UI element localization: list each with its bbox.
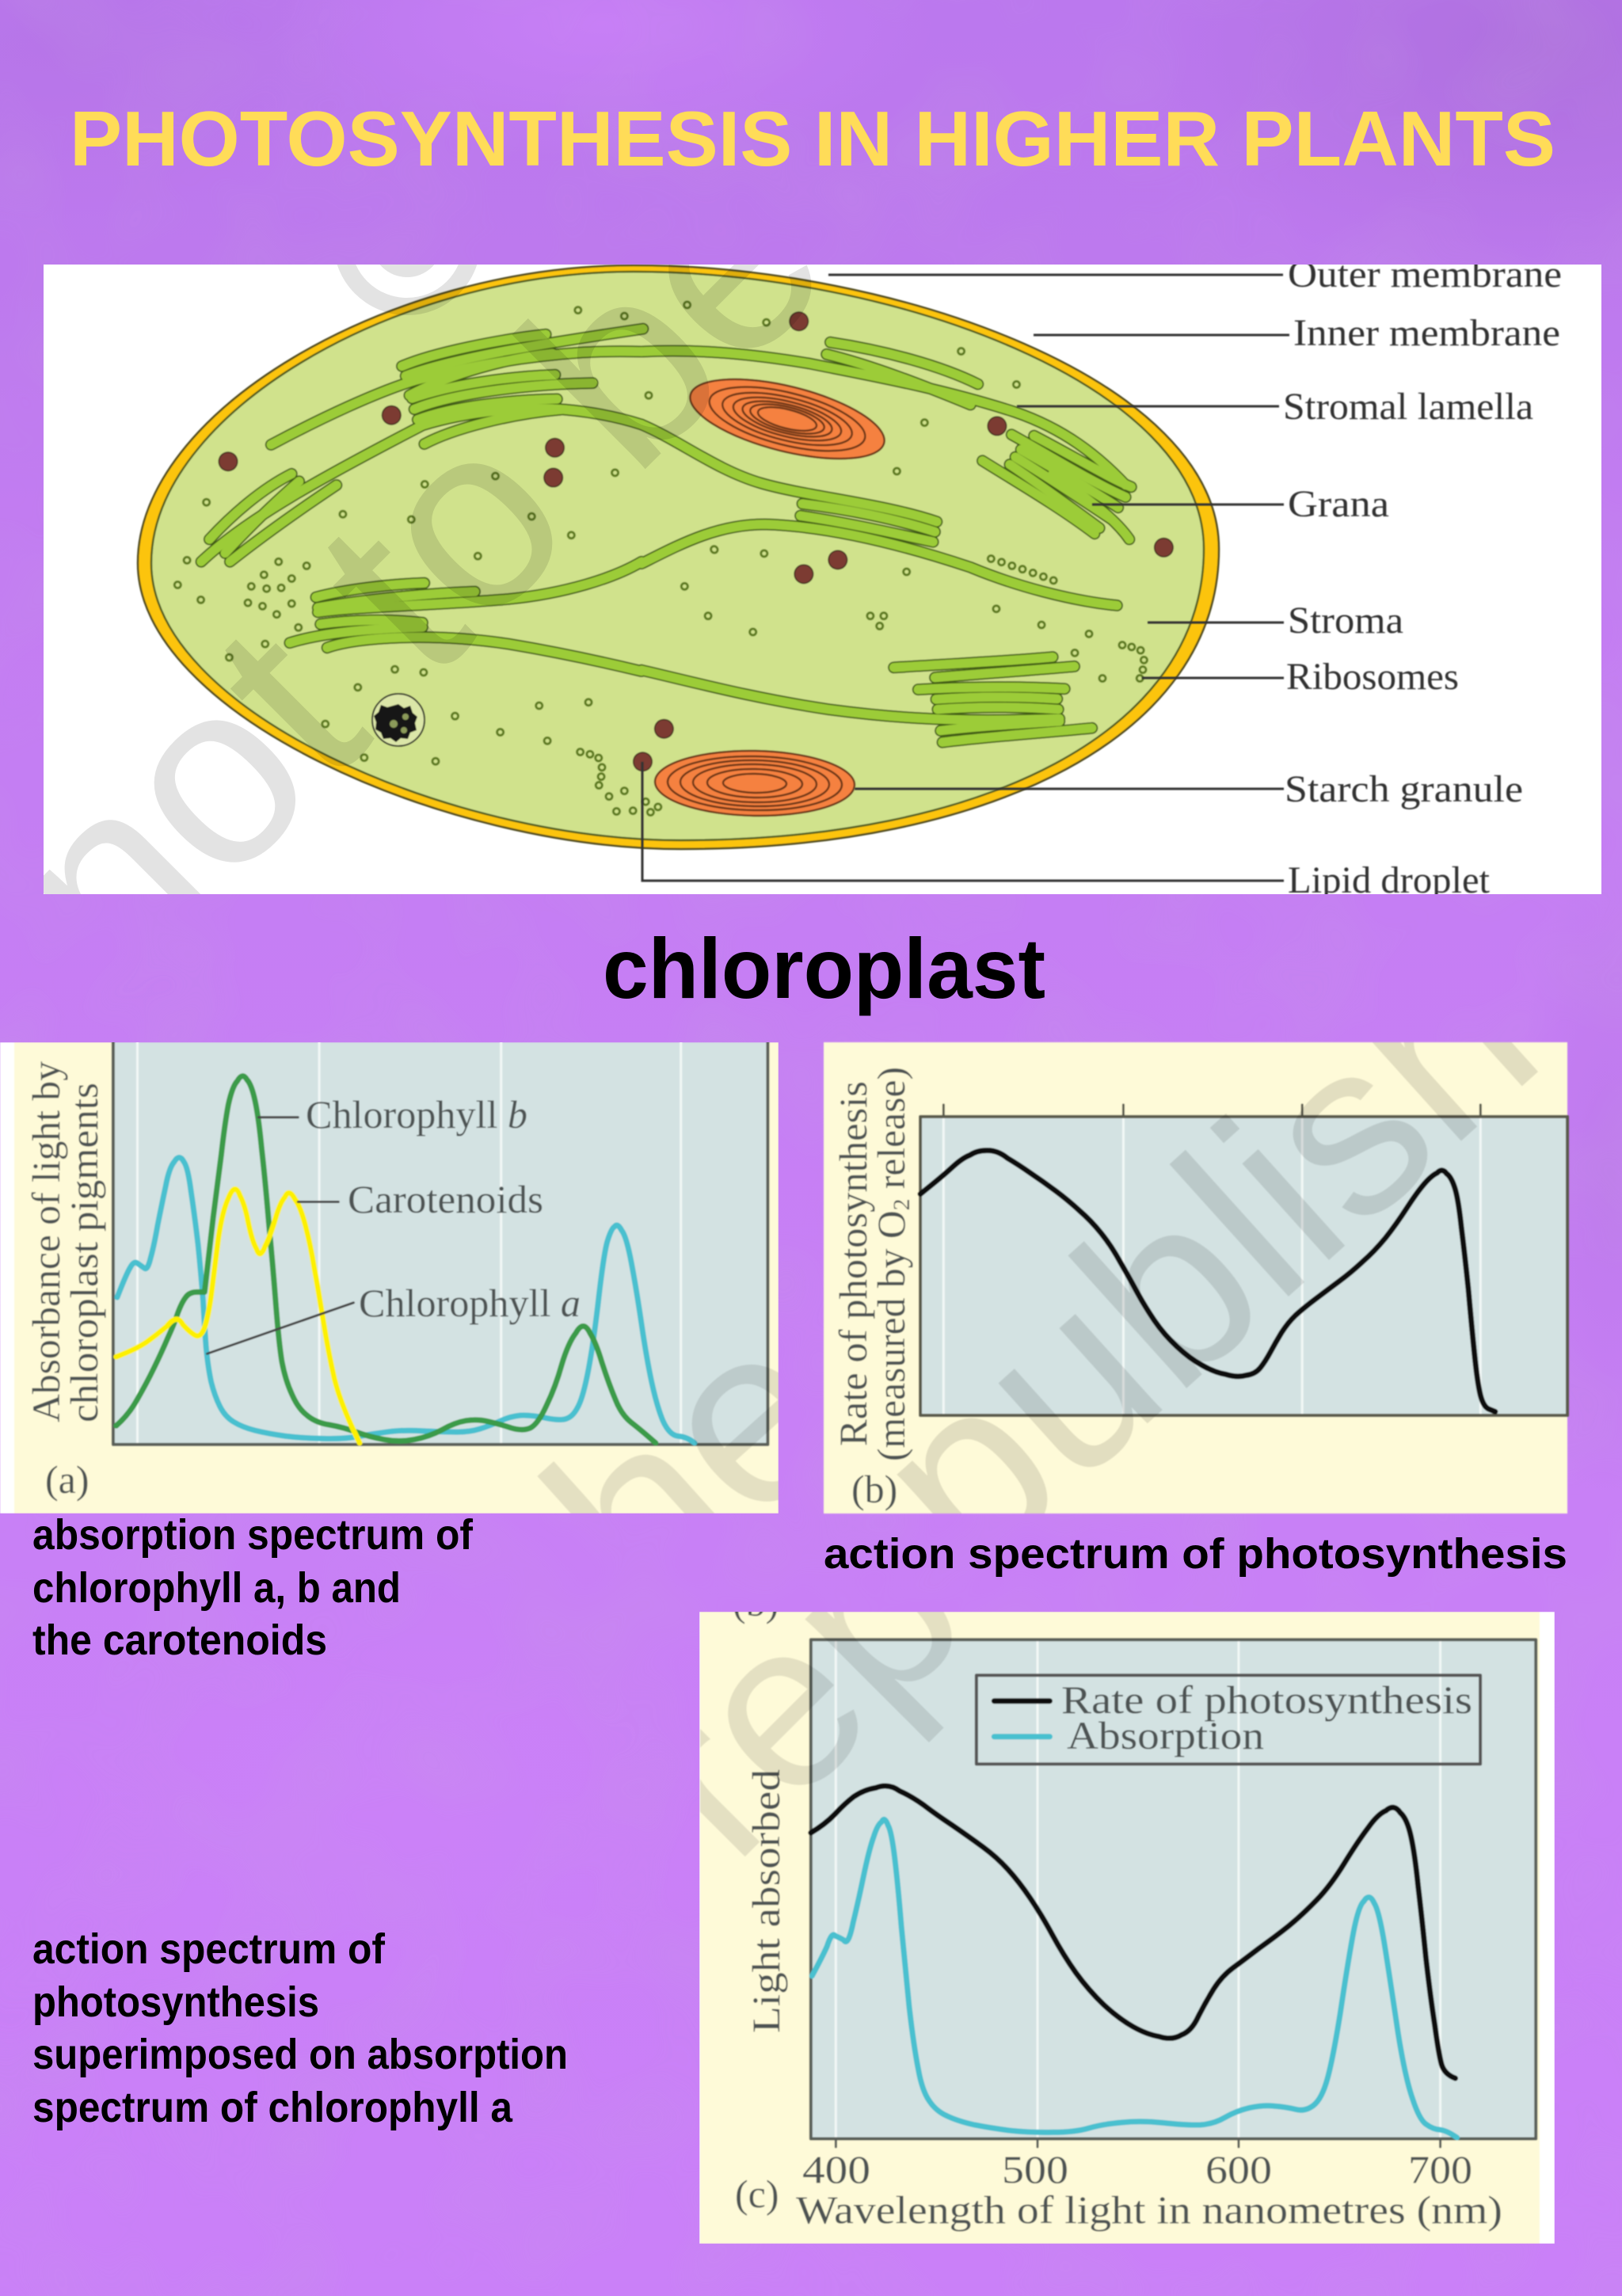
labels a: Chlorophyll a: [359, 1281, 581, 1325]
caption: superimposed spectra: action spectrum of: [32, 1925, 386, 1973]
labels c: Light absorbed: [744, 1769, 788, 2033]
labels c: Wavelength of light in nanometres (nm): [796, 2187, 1502, 2232]
watermark: rep: rep: [581, 1473, 1013, 1905]
labels a: [24, 1061, 581, 1502]
chart c: action spectrum superimposed on absorption spectrum: [581, 1473, 1555, 2244]
caption: absorption spectrum: absorption spectrum of: [32, 1511, 474, 1559]
outer membrane: [138, 265, 1219, 849]
chloroplast labels: Stromal lamella: [1283, 386, 1533, 428]
leader lines: [642, 275, 1289, 881]
labels a: (a): [45, 1457, 89, 1502]
watermark: he: he: [493, 1265, 893, 1665]
labels b: (measured by O: [869, 1209, 913, 1461]
labels b: (b): [851, 1467, 897, 1511]
labels c: 600: [1205, 2147, 1272, 2191]
panel: chloroplast diagram: [44, 265, 1601, 894]
labels a: chloroplast pigments: [62, 1083, 106, 1422]
caption: superimposed spectra: spectrum of chlorophyll a: [32, 2084, 513, 2131]
chloroplast labels: Inner membrane: [1293, 312, 1560, 354]
caption: superimposed spectra: photosynthesis: [32, 1978, 319, 2026]
labels b: [831, 1067, 915, 1511]
inner membrane and stroma: [151, 272, 1204, 840]
curve b: [920, 1105, 1567, 1415]
chloroplast body: [138, 265, 1219, 849]
watermark: publish: publish: [823, 896, 1586, 1621]
heading: chloroplast: chloroplast: [603, 920, 1045, 1016]
caption: superimposed spectra: superimposed on absorption: [32, 2031, 568, 2078]
labels c: 400: [802, 2147, 870, 2191]
labels b: Rate of photosynthesis: [831, 1081, 875, 1446]
labels a: Chlorophyll b: [306, 1092, 527, 1137]
thylakoid lamellae and grana: [201, 329, 1131, 742]
chart b: action spectrum: [823, 896, 1586, 1621]
caption: absorption spectrum: [32, 1511, 474, 1664]
title: PHOTOSYNTHESIS IN HIGHER PLANTS: [70, 95, 1555, 182]
curves a: [113, 1042, 767, 1445]
labels c: Rate of photosynthesis: [1061, 1677, 1472, 1722]
labels c: [733, 1580, 1502, 2232]
caption: absorption spectrum: chlorophyll a, b and: [32, 1564, 401, 1612]
chloroplast labels: Stroma: [1288, 600, 1403, 642]
curves c and legend: [811, 1639, 1536, 2147]
chloroplast labels: [1283, 253, 1562, 901]
labels c: Absorption: [1067, 1713, 1264, 1757]
labels c: 700: [1408, 2147, 1472, 2191]
labels b: release): [869, 1067, 913, 1198]
chloroplast labels: Grana: [1288, 483, 1389, 525]
chloroplast labels: Lipid droplet: [1288, 859, 1491, 901]
caption: absorption spectrum: the carotenoids: [32, 1616, 327, 1664]
watermark: not to be: [44, 265, 811, 894]
starch granule: upper: [688, 377, 886, 461]
labels c: (c): [735, 2172, 779, 2216]
caption: action spectrum: action spectrum of photosynthesis: [824, 1530, 1567, 1578]
chloroplast labels: Starch granule: [1285, 768, 1523, 810]
labels b: 2: [889, 1198, 915, 1210]
labels a: Absorbance of light by: [24, 1061, 68, 1422]
chloroplast labels: Ribosomes: [1286, 656, 1459, 698]
chloroplast labels: Outer membrane: [1288, 253, 1562, 295]
labels a: Carotenoids: [348, 1177, 543, 1221]
ribosomes: [177, 305, 1144, 812]
nucleoid: [372, 694, 425, 746]
labels c: (b): [733, 1580, 779, 1624]
starch granule: lower: [654, 749, 855, 817]
labels c: 500: [1002, 2147, 1068, 2191]
lipid droplets: [228, 322, 1163, 762]
caption: superimposed spectra: [32, 1925, 568, 2131]
chart a: absorption spectrum: [0, 1042, 893, 1665]
